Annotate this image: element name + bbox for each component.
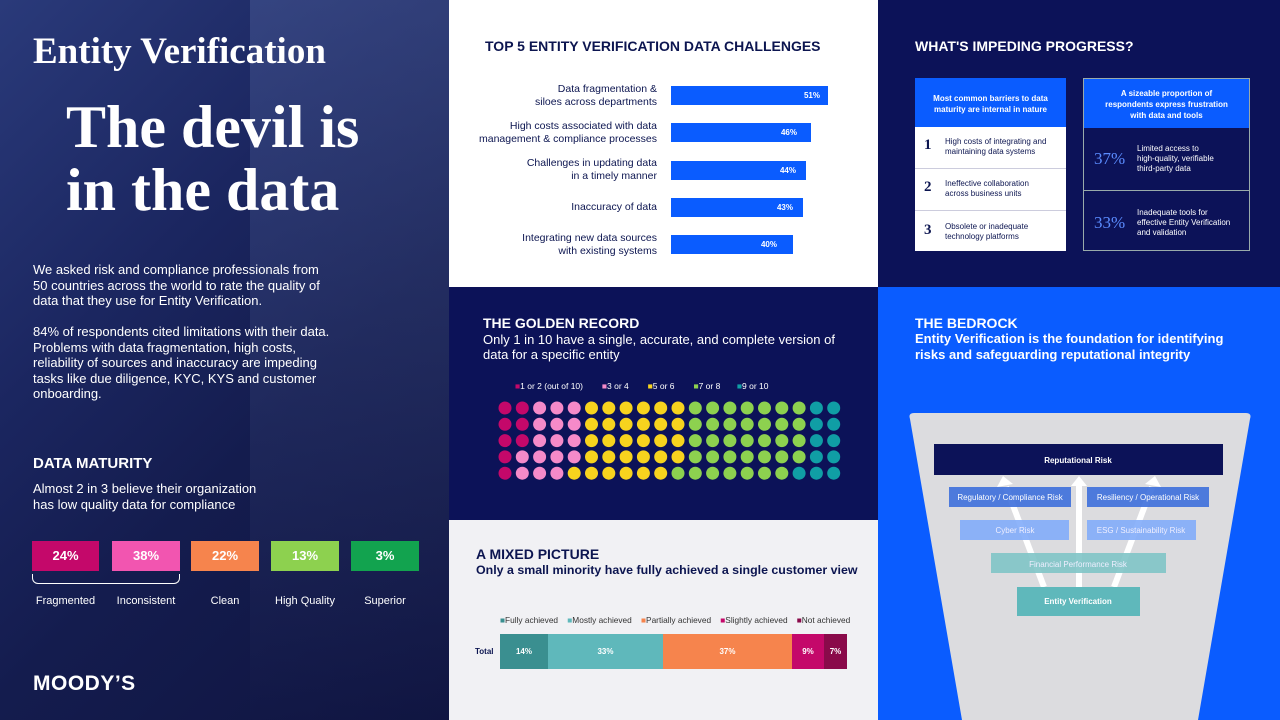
bar chart: management & compliance processes bbox=[479, 133, 657, 145]
maturity boxes: 3% bbox=[376, 548, 394, 563]
box: internal barriers: across business units bbox=[945, 189, 1021, 198]
subheading: risks and safeguarding reputational integrity bbox=[915, 346, 1190, 362]
headline: in the data bbox=[66, 157, 339, 223]
bar chart: 44% bbox=[780, 166, 796, 175]
box: internal barriers: technology platforms bbox=[945, 232, 1019, 241]
subheading bbox=[483, 332, 835, 362]
panel: mixed picture bbox=[449, 520, 878, 720]
box: frustration with data and tools bbox=[1083, 78, 1250, 251]
box: frustration with data and tools: third-party data bbox=[1137, 164, 1191, 173]
heading: data maturity: DATA MATURITY bbox=[33, 455, 152, 472]
legend: ■Fully achieved ■Mostly achieved ■Partially achieved ■Slightly achieved ■Not achieved bbox=[500, 615, 850, 625]
box: frustration with data and tools: Limited access to bbox=[1137, 144, 1199, 153]
bar chart: Integrating new data sources bbox=[522, 232, 657, 244]
box: frustration with data and tools: and validation bbox=[1137, 228, 1186, 237]
box: internal barriers: 2 bbox=[924, 179, 932, 195]
panel: top 5 challenges bbox=[449, 0, 878, 287]
stacked bar chart: Total bbox=[475, 647, 494, 656]
maturity boxes: Superior bbox=[364, 595, 406, 607]
bar chart: High costs associated with data bbox=[510, 120, 657, 132]
maturity boxes bbox=[32, 541, 419, 607]
maturity boxes: Clean bbox=[211, 595, 239, 607]
bar chart: Data fragmentation & bbox=[558, 83, 657, 95]
headline: The devil is bbox=[66, 94, 359, 160]
box: internal barriers: Ineffective collaboration bbox=[945, 179, 1029, 188]
funnel diagram: Reputational Risk bbox=[1044, 456, 1112, 465]
maturity boxes: 24% bbox=[52, 548, 79, 563]
box: internal barriers: Obsolete or inadequate bbox=[945, 222, 1028, 231]
subheading bbox=[33, 481, 256, 512]
intro text: 84% of respondents cited limitations with their data. Problems with data fragmentation, high costs, reliability of sources and inaccuracy are impeding tasks like due diligence, KYC, KYS and customer onboarding. bbox=[33, 324, 329, 401]
funnel diagram: Resiliency / Operational Risk bbox=[1097, 493, 1200, 502]
panel: the bedrock bbox=[878, 287, 1280, 720]
box: frustration with data and tools: 33% bbox=[1094, 213, 1125, 232]
box: internal barriers: 3 bbox=[924, 222, 932, 238]
box: frustration with data and tools: respondents express frustration bbox=[1105, 100, 1228, 109]
subheading: data for a specific entity bbox=[483, 347, 620, 362]
funnel diagram bbox=[910, 413, 1250, 720]
subheading: Only a small minority have fully achieved a single customer view bbox=[476, 563, 858, 577]
intro text bbox=[33, 262, 329, 401]
subheading: Entity Verification is the foundation for identifying bbox=[915, 331, 1223, 346]
heading: A MIXED PICTURE bbox=[476, 546, 599, 562]
bar chart: siloes across departments bbox=[535, 96, 657, 108]
legend: ■1 or 2 (out of 10) ■3 or 4 ■5 or 6 ■7 or 8 ■9 or 10 bbox=[515, 381, 768, 391]
bar chart: 46% bbox=[781, 128, 797, 137]
intro text: We asked risk and compliance professionals from 50 countries across the world to rate the quality of data that they use for Entity Verification. bbox=[33, 262, 320, 308]
bar chart bbox=[479, 83, 828, 257]
stacked bar chart: 14% bbox=[516, 647, 532, 656]
box: internal barriers bbox=[915, 78, 1066, 251]
bar chart: Challenges in updating data bbox=[527, 157, 657, 169]
stacked bar chart: 9% bbox=[802, 647, 814, 656]
box: frustration with data and tools: with data and tools bbox=[1130, 111, 1203, 120]
maturity boxes: High Quality bbox=[275, 595, 335, 607]
maturity boxes: 13% bbox=[292, 548, 318, 563]
subheading: Only 1 in 10 have a single, accurate, and complete version of bbox=[483, 332, 835, 347]
headline bbox=[66, 94, 359, 223]
box: frustration with data and tools: high-quality, verifiable bbox=[1137, 154, 1214, 163]
dot grid chart bbox=[498, 402, 840, 480]
funnel diagram: Entity Verification bbox=[1044, 597, 1112, 606]
panel: what's impeding progress bbox=[878, 0, 1280, 287]
box: internal barriers: Most common barriers to data bbox=[933, 94, 1048, 103]
maturity boxes: Fragmented bbox=[36, 595, 95, 607]
funnel diagram: ESG / Sustainability Risk bbox=[1097, 526, 1186, 535]
box: internal barriers: 1 bbox=[924, 137, 932, 153]
funnel diagram: Financial Performance Risk bbox=[1029, 560, 1128, 569]
heading: WHAT'S IMPEDING PROGRESS? bbox=[915, 38, 1134, 54]
box: frustration with data and tools: 37% bbox=[1094, 149, 1125, 168]
panel: golden record bbox=[449, 287, 878, 520]
maturity boxes: 22% bbox=[212, 548, 238, 563]
panel: left intro bbox=[0, 0, 449, 720]
box: frustration with data and tools: A sizeable proportion of bbox=[1121, 89, 1212, 98]
maturity boxes: Inconsistent bbox=[117, 595, 175, 607]
box: internal barriers: High costs of integrating and bbox=[945, 137, 1046, 146]
stacked bar chart: 37% bbox=[719, 647, 736, 656]
subheading: has low quality data for compliance bbox=[33, 497, 235, 512]
heading: TOP 5 ENTITY VERIFICATION DATA CHALLENGES bbox=[485, 38, 821, 54]
funnel diagram: Regulatory / Compliance Risk bbox=[957, 493, 1064, 502]
subheading bbox=[915, 331, 1223, 362]
arrows bbox=[997, 476, 1161, 587]
bar chart: Inaccuracy of data bbox=[571, 201, 657, 213]
maturity boxes: 38% bbox=[133, 548, 159, 563]
bar chart: 40% bbox=[761, 240, 777, 249]
stacked bar chart: 7% bbox=[830, 647, 841, 656]
stacked bar chart bbox=[475, 634, 847, 669]
bar chart: with existing systems bbox=[558, 245, 657, 257]
heading: THE GOLDEN RECORD bbox=[483, 315, 639, 331]
box: frustration with data and tools: effective Entity Verification bbox=[1137, 218, 1230, 227]
funnel diagram: Cyber Risk bbox=[995, 526, 1036, 535]
stacked bar chart: 33% bbox=[597, 647, 614, 656]
logo: MOODY’S bbox=[33, 672, 136, 695]
title: Entity Verification bbox=[33, 31, 326, 72]
bar chart: 51% bbox=[804, 91, 820, 100]
box: internal barriers: maturity are internal in nature bbox=[934, 105, 1047, 114]
subheading: Almost 2 in 3 believe their organization bbox=[33, 481, 256, 496]
bar chart: 43% bbox=[777, 203, 793, 212]
heading: THE BEDROCK bbox=[915, 315, 1018, 331]
box: frustration with data and tools: Inadequate tools for bbox=[1137, 208, 1208, 217]
bar chart: in a timely manner bbox=[571, 170, 657, 182]
box: internal barriers: maintaining data systems bbox=[945, 147, 1035, 156]
